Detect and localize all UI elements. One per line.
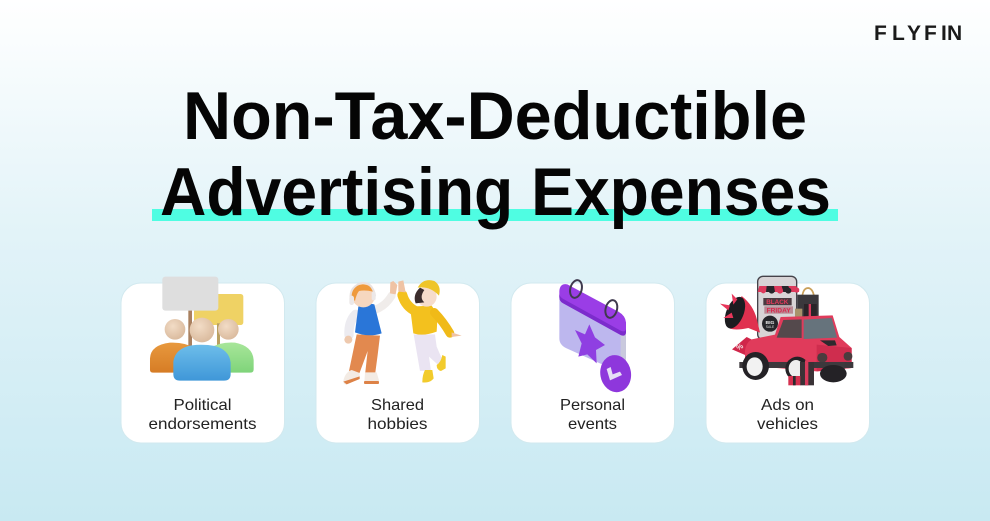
icon: calendar with star and check (559, 279, 634, 395)
card (121, 283, 284, 443)
card (706, 283, 870, 443)
title line 2: Advertising Expenses (160, 154, 831, 230)
panel: personal events: events (568, 416, 617, 433)
icon: car with Black Friday ads: BLACK (766, 299, 789, 306)
panel: shared hobbies (316, 280, 480, 443)
label: Ads on (761, 397, 814, 414)
logo: FLYFIN: FLYFIN (874, 22, 962, 45)
card (511, 283, 674, 443)
icon: car with Black Friday ads: BIG (766, 320, 775, 326)
icon: car with Black Friday ads: % (735, 341, 745, 352)
title highlight bar (152, 209, 838, 221)
panel: ads on vehicles: vehicles (757, 416, 818, 433)
icon: crowd with placards (150, 277, 254, 381)
panel: political endorsements (121, 277, 284, 443)
card (316, 283, 480, 443)
title (152, 78, 838, 230)
panel: political endorsements: endorsements (148, 416, 256, 433)
panel: ads on vehicles (706, 276, 870, 443)
icon: two people high-fiving (343, 280, 462, 384)
label: Political (174, 397, 232, 414)
icon: car with Black Friday ads (720, 276, 853, 385)
panel: shared hobbies: hobbies (368, 416, 428, 433)
icon: car with Black Friday ads: SALE (766, 325, 775, 329)
label: Personal (560, 397, 625, 414)
title line 1: Non-Tax-Deductible (183, 78, 807, 154)
label: Shared (371, 397, 424, 414)
panel: personal events (511, 279, 674, 443)
icon: car with Black Friday ads: FRIDAY (767, 307, 791, 314)
